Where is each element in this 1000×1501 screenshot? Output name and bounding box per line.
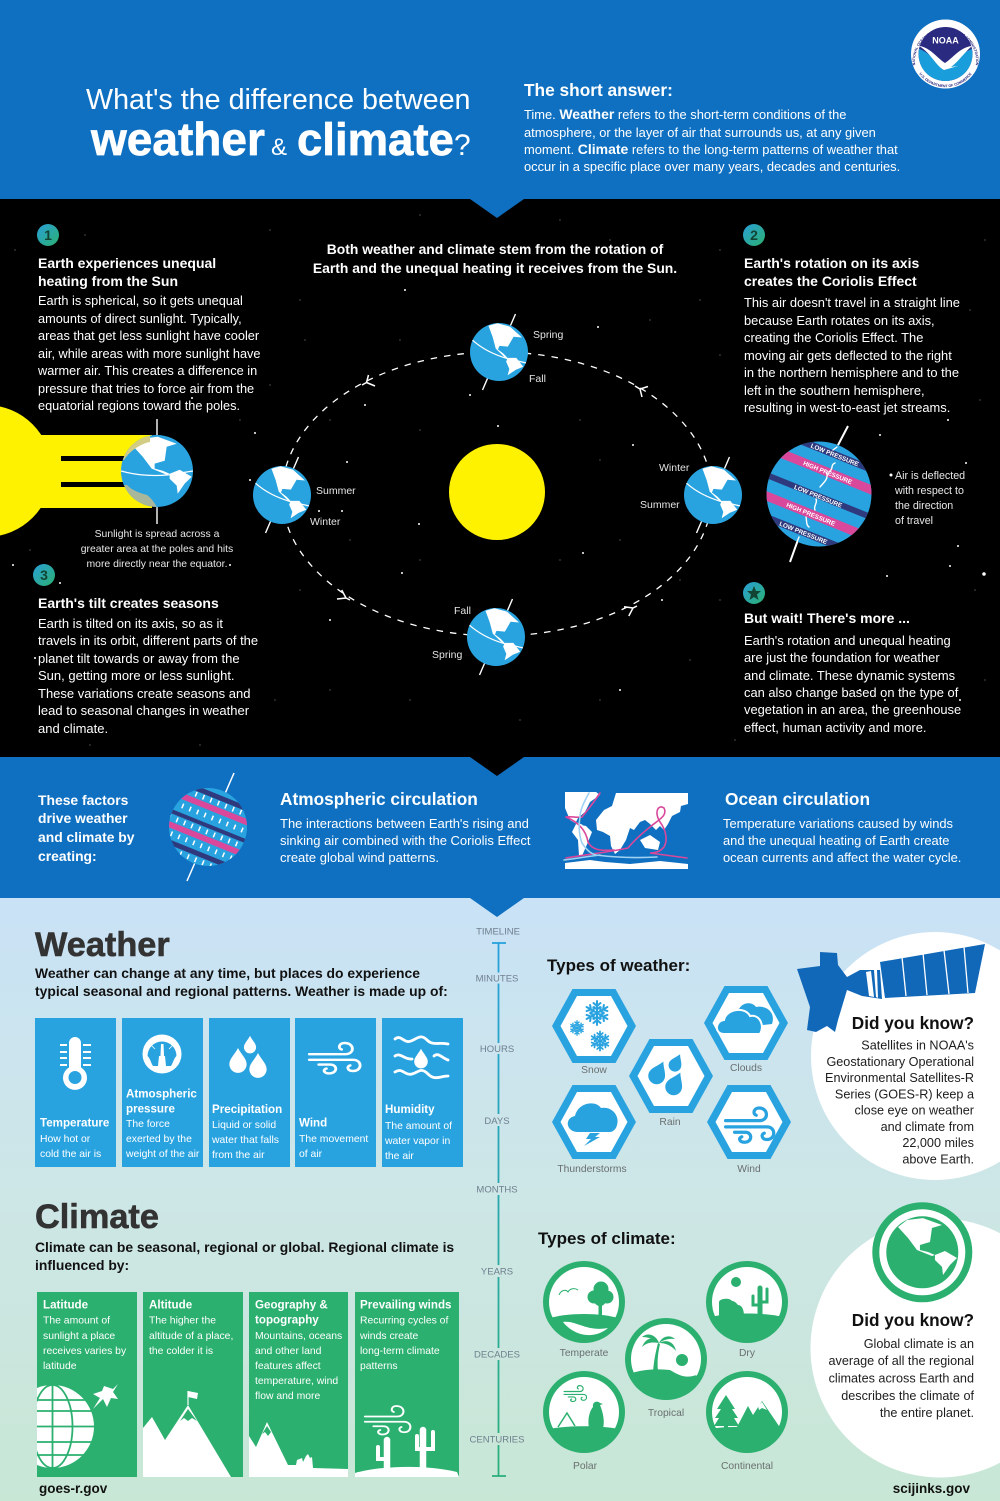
section 2: left in the southern hemisphere, <box>744 383 925 398</box>
icon: snow <box>552 989 636 1076</box>
card: wind: Wind <box>299 1116 327 1130</box>
ocean circulation <box>723 789 961 865</box>
section 1: Earth is spherical, so it gets unequal <box>38 293 243 308</box>
did you know: satellites: and climate from <box>881 1120 974 1134</box>
orbit diagram: Winter <box>659 462 690 474</box>
card: atmospheric pressure: The force <box>126 1119 170 1130</box>
card: temperature <box>35 1018 116 1167</box>
section 2: creates the Coriolis Effect <box>744 273 917 289</box>
card: altitude <box>143 1292 243 1477</box>
atmospheric circulation: The interactions between Earth's rising and <box>280 816 529 831</box>
icon: tropical: Tropical <box>648 1408 684 1419</box>
card: precipitation: Precipitation <box>212 1103 282 1116</box>
card: latitude: receives varies by <box>43 1346 127 1357</box>
icon: snow: Snow <box>581 1065 607 1076</box>
NOAA logo: U.S. DEPARTMENT OF COMMERCE <box>920 72 972 88</box>
climate heading: Climate <box>35 1198 159 1236</box>
card: prevailing winds: Recurring cycles of <box>360 1316 448 1326</box>
icon: polar <box>543 1371 625 1472</box>
ocean circulation: Temperature variations caused by winds <box>723 816 953 831</box>
more section: are just the foundation for weather <box>744 650 940 665</box>
section 1: air, while areas with more sunlight have <box>38 346 261 361</box>
card: humidity: the air <box>385 1151 414 1162</box>
icon: thunderstorms: Thunderstorms <box>557 1164 627 1175</box>
section 3: and climate. <box>38 721 108 736</box>
timeline: MONTHS <box>476 1184 518 1196</box>
icon: continental <box>706 1371 788 1472</box>
timeline: TIMELINE <box>476 926 520 938</box>
title: What's the difference between <box>86 84 470 116</box>
section 3: planet tilt towards or away from the <box>38 651 240 666</box>
card: humidity <box>382 1018 463 1167</box>
icon: temperate: Temperate <box>560 1348 609 1359</box>
intro heading: Earth and the unequal heating it receives from the Sun. <box>313 260 677 276</box>
intro heading: Both weather and climate stem from the rotation of <box>327 241 664 257</box>
card: humidity: water vapor in <box>384 1136 450 1147</box>
section 2: Earth's rotation on its axis <box>744 255 919 271</box>
did you know: satellites: Geostationary Operational <box>826 1055 974 1069</box>
section 1: amounts of direct sunlight. Typically, <box>38 311 242 326</box>
lower background <box>0 898 1000 1501</box>
title: & <box>271 134 287 161</box>
atmospheric circulation: sinking air combined with the Coriolis Effect <box>280 833 531 848</box>
space panel <box>0 199 1000 757</box>
orbit diagram <box>248 314 750 675</box>
deflection note <box>890 470 965 527</box>
weather heading: typical seasonal and regional patterns. Weather is made up of: <box>35 983 448 999</box>
icon: clouds <box>704 986 788 1074</box>
sunlight caption: more directly near the equator. <box>87 559 227 570</box>
timeline <box>470 926 524 1476</box>
section 2: resulting in west-to-east jet streams. <box>744 400 950 415</box>
short answer: The short answer: <box>524 80 673 100</box>
card: humidity: The amount of <box>385 1121 452 1132</box>
climate heading <box>35 1198 454 1273</box>
card: altitude: Altitude <box>149 1298 193 1312</box>
section 3: Earth is tilted on its axis, so as it <box>38 616 223 631</box>
orbit diagram: Summer <box>640 499 680 511</box>
card: temperature: Temperature <box>40 1116 110 1130</box>
icon: tropical <box>625 1318 707 1419</box>
short answer: Time. <box>524 107 559 122</box>
section 1 <box>37 224 261 413</box>
orbit diagram: Spring <box>533 329 564 341</box>
card: atmospheric pressure: exerted by the <box>126 1134 192 1145</box>
icon: rain: Rain <box>659 1117 681 1128</box>
card: geography and topography: Mountains, oceans <box>255 1331 342 1342</box>
did you know: satellites: Series (GOES-R) keep a <box>835 1088 975 1102</box>
section 3 <box>33 564 258 736</box>
section 1: warmer air. This creates a difference in <box>37 363 257 378</box>
sunlight caption: greater area at the poles and hits <box>81 544 233 555</box>
icon: dry <box>706 1261 788 1359</box>
black notch <box>470 757 524 776</box>
factors band <box>0 757 1000 898</box>
deflection note: of travel <box>895 515 933 527</box>
card: precipitation: water that falls <box>211 1135 279 1146</box>
atmospheric circulation: Atmospheric circulation <box>280 789 478 809</box>
card: prevailing winds: long-term climate <box>360 1346 440 1357</box>
card: altitude: The higher the <box>149 1316 216 1326</box>
orbit diagram: Winter <box>310 516 341 528</box>
card: prevailing winds: patterns <box>360 1361 398 1372</box>
band notch <box>470 898 524 917</box>
card: temperature: How hot or <box>40 1134 91 1145</box>
section 3: Earth's tilt creates seasons <box>38 595 219 611</box>
illustration: pressure bands planet: LOW PRESSURE <box>810 443 860 468</box>
section 1: heating from the Sun <box>38 273 178 289</box>
short answer: occur in a specific place over many years, decades and centuries. <box>524 159 900 174</box>
card: geography and topography <box>249 1292 348 1477</box>
factors intro: drive weather <box>38 810 128 826</box>
card: prevailing winds: Prevailing winds <box>360 1298 452 1312</box>
illustration: pressure bands planet: LOW PRESSURE <box>793 484 843 510</box>
illustration: pressure bands planet <box>766 426 872 562</box>
card: geography and topography: features affect <box>255 1361 321 1372</box>
icon: clouds: Clouds <box>730 1063 762 1074</box>
did you know: satellites: Environmental Satellites-R <box>825 1071 974 1085</box>
did you know: climate: Did you know? <box>852 1310 974 1330</box>
card: wind: The movement <box>299 1134 368 1145</box>
icon: dry: Dry <box>739 1348 756 1359</box>
card: prevailing winds <box>355 1292 459 1477</box>
icon: continental: Continental <box>721 1461 773 1472</box>
climate heading: Climate can be seasonal, regional or global. Regional climate is <box>35 1239 454 1255</box>
deflection note: with respect to <box>894 485 964 497</box>
section 2 <box>743 224 960 415</box>
icon: satellite <box>797 944 985 1032</box>
timeline: YEARS <box>481 1266 513 1278</box>
section 2: moving air gets deflected to the right <box>744 348 952 363</box>
card: geography and topography: topography <box>255 1314 319 1326</box>
card: altitude: altitude of a place, <box>149 1331 233 1342</box>
icon: polar: Polar <box>573 1461 598 1472</box>
ocean circulation: ocean currents and affect the water cycle. <box>723 850 961 865</box>
card: temperature: cold the air is <box>40 1149 101 1160</box>
types of weather: Types of weather: <box>547 956 690 975</box>
section 2: in the northern hemisphere and to the <box>744 365 959 380</box>
weather heading: Weather can change at any time, but places do experience <box>35 965 420 981</box>
card: wind <box>295 1018 376 1167</box>
footer link right: scijinks.gov <box>893 1481 970 1496</box>
NOAA logo: NOAA <box>932 36 959 46</box>
more section: and climate. These dynamic systems <box>744 668 955 683</box>
more section: But wait! There's more ... <box>744 610 910 626</box>
atmospheric circulation <box>280 789 531 865</box>
more section: Earth's rotation and unequal heating <box>744 633 951 648</box>
climate heading: influenced by: <box>35 1257 129 1273</box>
card: geography and topography: Geography & <box>255 1298 328 1312</box>
short answer: atmosphere, or the layer of air that surrounds us, at any given <box>524 125 876 140</box>
short answer: moment. <box>524 142 578 157</box>
did you know: climate: the entire planet. <box>880 1406 974 1420</box>
card: latitude: sunlight a place <box>43 1331 115 1342</box>
title: ? <box>454 129 471 162</box>
did you know: satellites: 22,000 miles <box>902 1136 974 1150</box>
title <box>86 84 471 165</box>
card: altitude: the colder it is <box>149 1346 213 1357</box>
card: geography and topography: temperature, wind <box>255 1376 338 1387</box>
section 1: Earth experiences unequal <box>38 255 216 271</box>
did you know: satellites: Satellites in NOAA's <box>861 1038 974 1052</box>
section 3: lead to seasonal changes in weather <box>38 703 250 718</box>
section 3: 3 <box>40 567 48 583</box>
card: humidity: Humidity <box>385 1103 435 1116</box>
card: latitude <box>37 1292 137 1477</box>
ocean circulation: and the unequal heating of Earth create <box>723 833 949 848</box>
more section <box>743 582 961 735</box>
NOAA logo: NATIONAL OCEANIC AND ATMOSPHERIC ADMINISTRATION <box>912 32 978 66</box>
timeline: HOURS <box>480 1044 514 1055</box>
orbit diagram: Fall <box>529 373 546 385</box>
card: geography and topography: and other land <box>255 1346 322 1357</box>
illustration: pressure bands planet: HIGH PRESSURE <box>785 502 836 528</box>
did you know: satellites: above Earth. <box>902 1152 974 1166</box>
card: latitude: The amount of <box>43 1316 110 1326</box>
title: climate <box>297 114 454 165</box>
card: atmospheric pressure: weight of the air <box>125 1149 200 1160</box>
timeline: DECADES <box>474 1350 520 1360</box>
icon: temperate <box>543 1261 625 1359</box>
section 1: equatorial regions toward the poles. <box>38 398 240 413</box>
factors intro: creating: <box>38 848 97 864</box>
card: prevailing winds: winds create <box>359 1331 419 1342</box>
section 3: Sun, getting more or less sunlight. <box>38 668 235 683</box>
ocean circulation: Ocean circulation <box>725 789 870 809</box>
section 2: because Earth rotates on its axis, <box>744 313 935 328</box>
illustration: pressure bands planet: LOW PRESSURE <box>778 521 828 546</box>
ocean map <box>564 792 688 869</box>
icon: earth <box>872 1202 972 1302</box>
did you know: climate: Global climate is an <box>864 1337 974 1351</box>
sun <box>449 444 545 540</box>
section 2: This air doesn't travel in a straight line <box>744 295 960 310</box>
title: weather <box>90 113 265 165</box>
timeline: MINUTES <box>476 974 518 984</box>
illustration: sunlight on Earth <box>0 405 193 537</box>
orbit diagram: Summer <box>316 485 356 497</box>
orbit diagram: Fall <box>454 605 471 617</box>
icon: thunderstorms <box>552 1085 636 1175</box>
short answer <box>524 80 900 174</box>
card: latitude: Latitude <box>43 1298 89 1312</box>
weather heading <box>35 926 448 999</box>
card: precipitation: from the air <box>212 1150 265 1161</box>
did you know: climate <box>810 1202 1000 1478</box>
timeline: DAYS <box>484 1116 510 1127</box>
short answer: Climate refers to the long-term patterns of weather that <box>578 141 898 157</box>
icon: wind type: Wind <box>737 1164 761 1175</box>
did you know: satellites: close eye on weather <box>855 1104 974 1118</box>
deflection note: Air is deflected <box>895 470 965 482</box>
weather heading: Weather <box>35 926 170 964</box>
deflection note: the direction <box>895 500 953 512</box>
header notch <box>470 199 524 218</box>
card: precipitation: Liquid or solid <box>212 1120 276 1131</box>
section 1: 1 <box>44 227 52 243</box>
short answer: Weather refers to the short-term conditions of the <box>559 106 846 122</box>
timeline: CENTURIES <box>470 1434 524 1446</box>
did you know: satellites <box>797 932 1000 1180</box>
illustration: pressure bands planet: HIGH PRESSURE <box>802 460 853 486</box>
card: geography and topography: flow and more <box>255 1391 320 1402</box>
card: wind: of air <box>299 1149 323 1160</box>
more section: effect, human activity and more. <box>744 720 926 735</box>
section 2: creating the Coriolis Effect. The <box>744 330 923 345</box>
footer link left: goes-r.gov <box>39 1481 108 1496</box>
more section: can also change based on the type of <box>744 685 959 700</box>
section 3: travels in its orbit, different parts of the <box>38 633 258 648</box>
factors intro: and climate by <box>38 829 135 845</box>
card: latitude: latitude <box>43 1361 77 1372</box>
icon: wind type <box>707 1085 791 1175</box>
more section: vegetation in an area, the greenhouse <box>744 702 961 717</box>
orbit diagram: Spring <box>432 649 463 661</box>
icon: circulation planet <box>169 772 247 882</box>
NOAA logo <box>911 20 980 88</box>
types of climate: Types of climate: <box>538 1229 676 1248</box>
card: precipitation <box>209 1018 290 1167</box>
section 1: areas that get less sunlight have cooler <box>38 328 260 343</box>
header band <box>0 0 1000 199</box>
atmospheric circulation: create global wind patterns. <box>280 850 439 865</box>
section 3: These variations create seasons and <box>38 686 250 701</box>
did you know: satellites: Did you know? <box>852 1013 974 1033</box>
did you know: climate: describes the climate of <box>841 1389 974 1403</box>
did you know: climate: climates across Earth and <box>829 1372 974 1386</box>
factors intro: These factors <box>38 792 129 808</box>
section 1: pressure that tries to force air from the <box>38 381 254 396</box>
card: atmospheric pressure: Atmospheric <box>126 1088 197 1100</box>
card: atmospheric pressure <box>122 1018 203 1167</box>
card: atmospheric pressure: pressure <box>126 1102 176 1116</box>
icon: rain <box>629 1039 713 1128</box>
sunlight caption: Sunlight is spread across a <box>95 529 220 540</box>
did you know: climate: average of all the regional <box>829 1354 974 1368</box>
section 2: 2 <box>750 227 758 243</box>
